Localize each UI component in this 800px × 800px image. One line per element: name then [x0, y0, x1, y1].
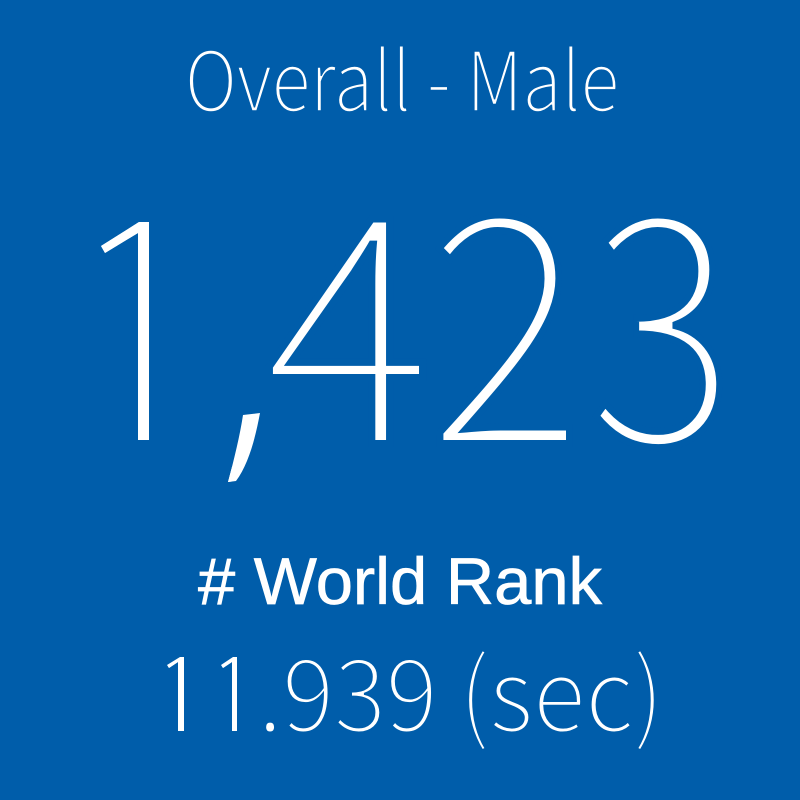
- big number: rank: 2: [427, 76, 584, 535]
- time value: .939 (sec): [258, 615, 664, 760]
- time value: 1: [151, 641, 207, 753]
- title: Overall - Male: [185, 16, 619, 135]
- infographic panel: [101, 46, 716, 749]
- label: world rank: # World Rank: [198, 544, 603, 618]
- big number: rank: 1: [40, 150, 218, 508]
- big number: rank: [101, 218, 716, 482]
- big number: rank: 3: [588, 76, 735, 535]
- time value: 1: [205, 641, 261, 753]
- big number: rank: 4: [263, 76, 433, 536]
- time value: [167, 651, 654, 749]
